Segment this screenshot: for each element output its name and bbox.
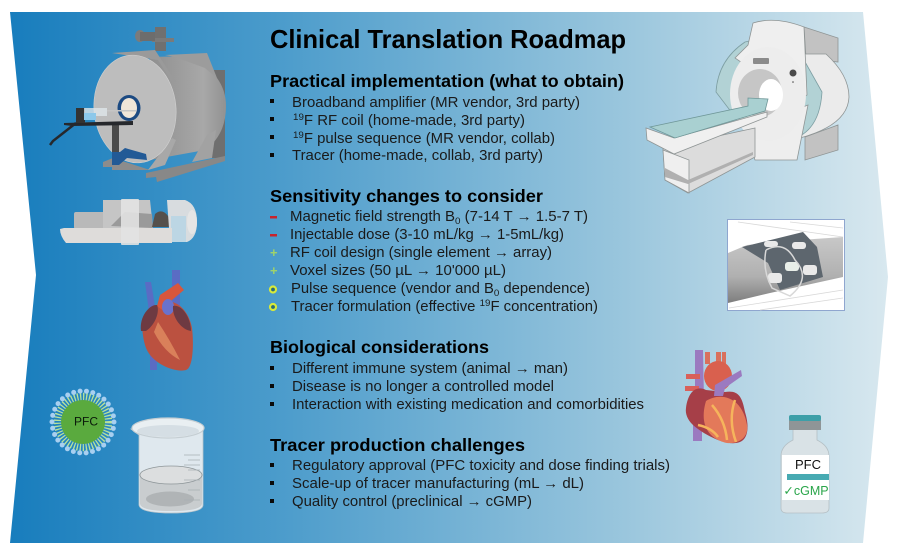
icon: PFC vial: ✓cGMP (783, 483, 829, 498)
section: biological considerations (270, 337, 644, 413)
list: sensitivity items: + (270, 245, 278, 260)
icon: PFC nanoparticle: PFC (74, 414, 98, 428)
list: sensitivity items: Pulse sequence (vendor and B (291, 281, 489, 297)
heading: tracer production: Tracer production challenges (270, 435, 525, 455)
list: sensitivity items: + (270, 263, 278, 278)
list: practical items (270, 95, 580, 164)
heading: practical implementation: Practical implementation (what to obtain) (270, 71, 624, 91)
list: sensitivity items: dependence) (499, 281, 590, 297)
list: practical items: Tracer (home-made, collab, 3rd party) (292, 148, 543, 164)
list: biological items: Interaction with existing medication and comorbidities (292, 397, 644, 413)
list: tracer items: Scale-up of tracer manufacturing (mL → dL) (292, 476, 584, 492)
list: biological items (270, 361, 644, 413)
icon: large heart (685, 350, 748, 443)
list: sensitivity items: Injectable dose (3-10 mL/kg → 1-5mL/kg) (290, 227, 564, 243)
list: practical items: 19 (293, 130, 304, 141)
list: sensitivity items (270, 209, 598, 315)
list: biological items: Disease is no longer a controlled model (292, 379, 554, 395)
icon: beaker (131, 418, 204, 513)
list: sensitivity items: 0 (494, 288, 499, 299)
list: sensitivity items: (7-14 T → 1.5-7 T) (460, 209, 588, 225)
list: practical items: F pulse sequence (MR vendor, collab) (304, 131, 555, 147)
heading: biological considerations: Biological considerations (270, 337, 489, 357)
list: sensitivity items: F concentration) (490, 299, 598, 315)
list: sensitivity items: 19 (480, 298, 490, 309)
list: tracer items: Regulatory approval (PFC toxicity and dose finding trials) (292, 458, 670, 474)
icon: clinical MRI scanner (646, 20, 849, 193)
list: sensitivity items: Magnetic field strength B (290, 209, 450, 225)
list: sensitivity items: Voxel sizes (50 µL → 10'000 µL) (290, 263, 506, 279)
list: sensitivity items: 0 (455, 216, 460, 227)
icon: preclinical MRI scanner (50, 27, 226, 182)
list: practical items: Broadband amplifier (MR vendor, 3rd party) (292, 95, 580, 111)
list: biological items: Different immune system (animal → man) (292, 361, 568, 377)
icon: PFC vial (781, 415, 829, 513)
section: sensitivity changes (270, 186, 598, 315)
section: tracer production (270, 435, 670, 510)
icon: PFC nanoparticle (52, 391, 114, 453)
icon: PFC vial: PFC (795, 457, 821, 472)
title: Clinical Translation Roadmap (270, 24, 626, 54)
list: tracer items: Quality control (preclinical → cGMP) (292, 494, 532, 510)
list: sensitivity items: Tracer formulation (effective (291, 299, 471, 315)
icon: animal coil bed (60, 199, 197, 245)
icon: small heart (141, 270, 193, 371)
list: tracer items (270, 458, 670, 510)
list: practical items: 19 (293, 112, 304, 123)
list: practical items: F RF coil (home-made, 3rd party) (304, 113, 525, 129)
list: sensitivity items: RF coil design (single element → array) (290, 245, 552, 261)
heading: sensitivity changes: Sensitivity changes to consider (270, 186, 543, 206)
section: practical implementation (270, 71, 624, 164)
icon: surface coil photo (728, 220, 844, 310)
